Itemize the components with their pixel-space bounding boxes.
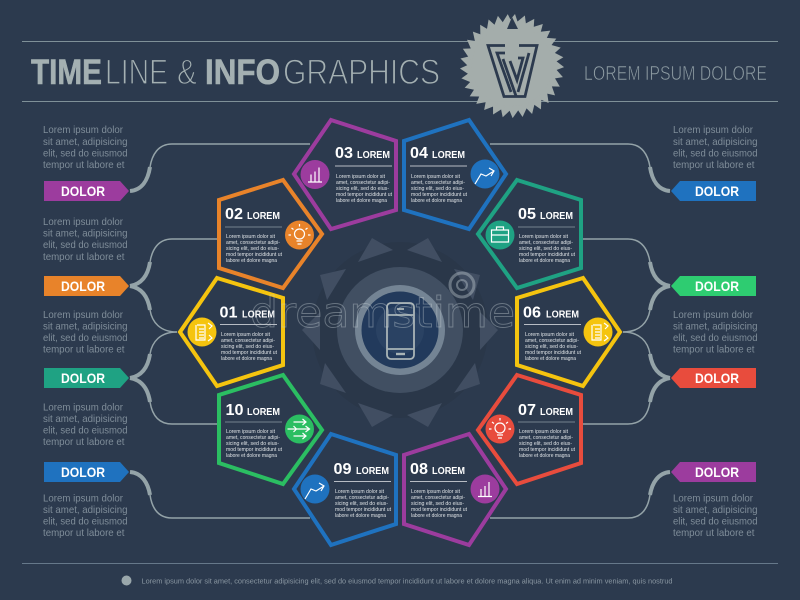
text 02: sicing elit, sed do eius- xyxy=(226,246,279,252)
heading 04: LOREM xyxy=(432,150,465,161)
text 09: mod tempor incididunt ut xyxy=(335,507,392,513)
panel 01 xyxy=(180,278,283,386)
text 01: labore et dolore magna xyxy=(221,356,272,362)
text 02: amet, consectetur adipi- xyxy=(226,240,280,246)
title xyxy=(31,53,440,92)
heading 05: LOREM xyxy=(540,211,573,222)
text 05: labore et dolore magna xyxy=(519,258,570,264)
heading 08 xyxy=(410,461,465,478)
icon: trend arrow xyxy=(300,474,330,504)
text 04: amet, consectetur adipi- xyxy=(411,180,465,186)
title: TIME xyxy=(31,53,102,92)
text 07: mod tempor incididunt ut xyxy=(519,447,576,453)
text 08 xyxy=(411,489,468,519)
text 06: sicing elit, sed do eius- xyxy=(525,344,578,350)
heading 07: 07 xyxy=(518,402,536,419)
left text block 1: elit, sed do eiusmod xyxy=(43,148,128,160)
text 02: mod tempor incididunt ut xyxy=(226,252,283,258)
text 05: sicing elit, sed do eius- xyxy=(519,246,572,252)
left text block 2 xyxy=(43,217,128,263)
text 03: amet, consectetur adipi- xyxy=(336,180,390,186)
text 01 xyxy=(221,332,278,362)
left text block 2: tempor ut labore et xyxy=(43,252,125,263)
heading 04: 04 xyxy=(410,145,428,162)
left tag: blue xyxy=(44,462,129,482)
heading 05 xyxy=(518,206,573,223)
icon: arrows xyxy=(285,414,314,444)
text 01: sicing elit, sed do eius- xyxy=(221,344,274,350)
left tag: purple: DOLOR xyxy=(61,183,105,199)
heading 10: LOREM xyxy=(247,407,280,418)
left tag: purple xyxy=(44,181,129,201)
left text block 4 xyxy=(43,402,128,448)
text 04: Lorem ipsum dolor sit xyxy=(411,174,461,180)
heading 06 xyxy=(523,304,579,322)
heading 03: LOREM xyxy=(357,150,390,161)
heading 01 xyxy=(220,304,275,322)
right tag: green: DOLOR xyxy=(695,278,739,294)
left text block 4: sit amet, adipisicing xyxy=(43,414,128,425)
heading 10 xyxy=(226,402,280,419)
heading 01: 01 xyxy=(220,304,238,322)
text 09 xyxy=(335,489,392,519)
text 10: Lorem ipsum dolor sit xyxy=(226,429,276,435)
text 02 xyxy=(226,234,283,264)
panel 04 xyxy=(404,120,506,229)
icon: light bulb xyxy=(285,220,314,250)
text 01: mod tempor incididunt ut xyxy=(221,350,278,356)
text 09: Lorem ipsum dolor sit xyxy=(335,489,385,495)
right tag: blue: DOLOR xyxy=(695,183,739,199)
left text block 1: Lorem ipsum dolor xyxy=(43,125,124,136)
right tag: purple xyxy=(671,462,756,482)
icon: light bulb xyxy=(486,414,514,444)
heading 08: LOREM xyxy=(432,466,465,477)
heading 02 xyxy=(225,206,280,223)
right text block 2: tempor ut labore et xyxy=(673,344,755,356)
left text block 1: sit amet, adipisicing xyxy=(43,137,128,148)
text 01: Lorem ipsum dolor sit xyxy=(221,332,271,338)
left tag: teal: DOLOR xyxy=(61,370,105,386)
left text block 1 xyxy=(43,125,128,171)
text 06: labore et dolore magna xyxy=(525,356,576,362)
text 08: amet, consectetur adipi- xyxy=(411,495,465,501)
panel 03 xyxy=(294,120,396,229)
left text block 3: elit, sed do eiusmod xyxy=(43,333,128,344)
heading 02: 02 xyxy=(225,206,243,223)
right text block 1 xyxy=(673,125,758,171)
text 02: labore et dolore magna xyxy=(226,258,277,264)
text 06: Lorem ipsum dolor sit xyxy=(525,332,575,338)
heading 03 xyxy=(335,145,390,162)
right text block 1: elit, sed do eiusmod xyxy=(673,148,758,160)
panel 05 xyxy=(478,180,581,288)
right text block 3: Lorem ipsum dolor xyxy=(673,494,754,504)
left text block 4: tempor ut labore et xyxy=(43,437,125,448)
heading 10: 10 xyxy=(226,402,244,419)
text 03: Lorem ipsum dolor sit xyxy=(336,174,386,180)
left text block 5: Lorem ipsum dolor xyxy=(43,494,124,504)
text 02: Lorem ipsum dolor sit xyxy=(226,234,276,240)
right text block 2 xyxy=(673,310,758,356)
right text block 1: tempor ut labore et xyxy=(673,160,755,171)
center hub xyxy=(302,238,498,427)
heading 06: 06 xyxy=(523,304,541,322)
right text block 3 xyxy=(673,494,758,539)
left text block 1: tempor ut labore et xyxy=(43,160,125,171)
heading 05: 05 xyxy=(518,206,536,223)
right tag: red: DOLOR xyxy=(695,370,739,386)
text 05: Lorem ipsum dolor sit xyxy=(519,234,569,240)
left text block 5: tempor ut labore et xyxy=(43,528,125,539)
panel 06 xyxy=(517,278,620,386)
left text block 3 xyxy=(43,310,128,356)
icon: briefcase xyxy=(486,220,514,250)
heading 08: 08 xyxy=(410,461,428,478)
heading 09: 09 xyxy=(334,461,352,478)
icon: bar chart xyxy=(300,160,330,189)
text 01: amet, consectetur adipi- xyxy=(221,338,275,344)
heading 07 xyxy=(518,402,573,419)
icon: document xyxy=(584,318,612,346)
text 06 xyxy=(525,332,582,362)
text 07: amet, consectetur adipi- xyxy=(519,435,573,441)
text 07: sicing elit, sed do eius- xyxy=(519,441,572,447)
right text block 3: tempor ut labore et xyxy=(673,528,755,539)
left text block 3: tempor ut labore et xyxy=(43,344,125,356)
title: GRAPHICS xyxy=(283,53,440,92)
text 03 xyxy=(336,174,393,204)
heading 02: LOREM xyxy=(247,211,280,222)
text 08: labore et dolore magna xyxy=(411,513,462,519)
left text block 3: sit amet, adipisicing xyxy=(43,322,128,332)
icon: document xyxy=(188,318,216,346)
right text block 2: elit, sed do eiusmod xyxy=(673,333,758,344)
text 07 xyxy=(519,429,576,459)
left text block 3: Lorem ipsum dolor xyxy=(43,310,124,321)
text 05 xyxy=(519,234,576,264)
icon: smartphone xyxy=(387,303,414,359)
footer note: Lorem ipsum dolor sit amet, consectetur adipisicing elit, sed do eiusmod tempor incididunt ut labore et dolore magna aliqua. Ut enim ad minim veniam, quis nostrud xyxy=(142,576,672,586)
text 08: mod tempor incididunt ut xyxy=(411,507,468,513)
text 03: sicing elit, sed do eius- xyxy=(336,186,389,192)
heading 09: LOREM xyxy=(356,466,389,477)
connectors right xyxy=(490,144,670,518)
text 06: mod tempor incididunt ut xyxy=(525,350,582,356)
text 09: amet, consectetur adipi- xyxy=(335,495,389,501)
text 10 xyxy=(226,429,283,459)
panel 02 xyxy=(219,180,322,288)
text 08: sicing elit, sed do eius- xyxy=(411,501,464,507)
right text block 3: sit amet, adipisicing xyxy=(673,505,758,516)
text 03: mod tempor incididunt ut xyxy=(336,192,393,198)
right tag: red xyxy=(671,368,756,388)
title: INFO xyxy=(205,53,280,92)
right text block 1: sit amet, adipisicing xyxy=(673,137,758,148)
right tag: purple: DOLOR xyxy=(695,464,739,480)
text 05: amet, consectetur adipi- xyxy=(519,240,573,246)
title: LINE xyxy=(105,53,168,92)
text 04: sicing elit, sed do eius- xyxy=(411,186,464,192)
text 05: mod tempor incididunt ut xyxy=(519,252,576,258)
text 04 xyxy=(411,174,468,204)
icon: trend arrow xyxy=(470,160,500,188)
right text block 2: Lorem ipsum dolor xyxy=(673,310,754,321)
panel 07 xyxy=(478,375,581,484)
right text block 3: elit, sed do eiusmod xyxy=(673,516,758,528)
left text block 2: sit amet, adipisicing xyxy=(43,228,128,240)
logo seal xyxy=(460,14,564,118)
left tag: blue: DOLOR xyxy=(61,464,105,480)
left text block 2: Lorem ipsum dolor xyxy=(43,217,124,228)
text 10: amet, consectetur adipi- xyxy=(226,435,280,441)
heading 01: LOREM xyxy=(242,310,275,320)
left text block 4: elit, sed do eiusmod xyxy=(43,426,128,436)
left text block 4: Lorem ipsum dolor xyxy=(43,402,124,414)
left tag: orange: DOLOR xyxy=(61,278,105,294)
heading 03: 03 xyxy=(335,145,353,162)
right tag: green xyxy=(671,276,756,296)
text 10: sicing elit, sed do eius- xyxy=(226,441,279,447)
heading 06: LOREM xyxy=(546,310,579,320)
panel 09 xyxy=(294,434,396,545)
text 10: labore et dolore magna xyxy=(226,453,277,459)
icon: bar chart xyxy=(470,474,500,504)
left text block 5: sit amet, adipisicing xyxy=(43,505,128,516)
panel 10 xyxy=(219,375,322,484)
text 08: Lorem ipsum dolor sit xyxy=(411,489,461,495)
right tag: blue xyxy=(671,181,756,201)
text 09: sicing elit, sed do eius- xyxy=(335,501,388,507)
text 03: labore et dolore magna xyxy=(336,198,387,204)
left text block 5 xyxy=(43,494,128,539)
panel 08 xyxy=(404,434,506,545)
connectors left xyxy=(130,144,310,518)
title: & xyxy=(177,53,197,92)
text 06: amet, consectetur adipi- xyxy=(525,338,579,344)
right text block 2: sit amet, adipisicing xyxy=(673,322,758,332)
heading 09 xyxy=(334,461,389,478)
left tag: orange xyxy=(44,276,129,296)
left text block 2: elit, sed do eiusmod xyxy=(43,240,128,251)
text 04: mod tempor incididunt ut xyxy=(411,192,468,198)
text 07: labore et dolore magna xyxy=(519,453,570,459)
text 09: labore et dolore magna xyxy=(335,513,386,519)
text 07: Lorem ipsum dolor sit xyxy=(519,429,569,435)
left text block 5: elit, sed do eiusmod xyxy=(43,516,128,528)
heading 07: LOREM xyxy=(540,407,573,418)
text 10: mod tempor incididunt ut xyxy=(226,447,283,453)
left tag: teal xyxy=(44,368,129,388)
text 04: labore et dolore magna xyxy=(411,198,462,204)
heading 04 xyxy=(410,145,465,162)
watermark: dreamstime xyxy=(250,288,515,337)
right text block 1: Lorem ipsum dolor xyxy=(673,125,754,136)
